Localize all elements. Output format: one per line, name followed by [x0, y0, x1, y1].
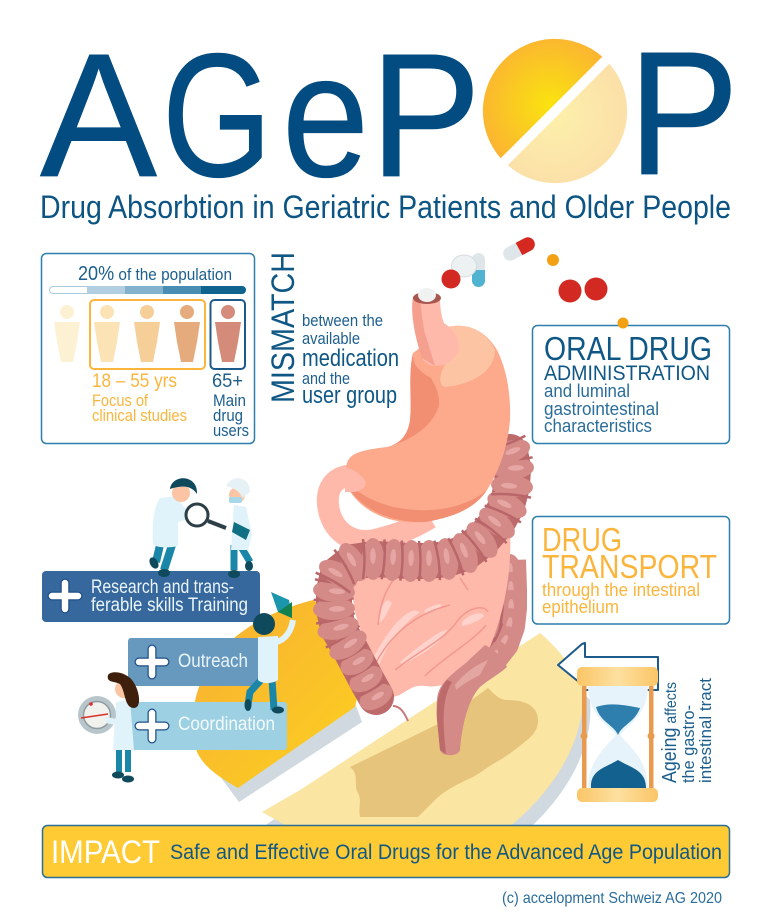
- label: main drug users: Main: [213, 391, 246, 410]
- text: ageing affects: Ageing affects: [659, 682, 681, 783]
- label: main drug users: 65+: [212, 371, 243, 392]
- button: outreach: Outreach: [178, 651, 248, 672]
- panel: drug transport: TRANSPORT: [542, 548, 717, 585]
- text: ageing affects: [659, 678, 715, 783]
- heading: 20% of the population: 20% of the population: [78, 263, 232, 285]
- label: clinical studies: [92, 371, 187, 425]
- text: mismatch description: between the: [302, 311, 383, 330]
- button: research training: [42, 571, 260, 622]
- panel: oral drug administration: and luminal: [544, 381, 630, 401]
- text: mismatch description: [302, 311, 399, 409]
- label: clinical studies: 18 – 55 yrs: [92, 371, 177, 392]
- heading: MISMATCH: MISMATCH: [265, 252, 301, 403]
- panel: drug transport: through the intestinal: [542, 580, 700, 600]
- title: AGePOP: e: [282, 18, 369, 214]
- label: clinical studies: Focus of: [92, 391, 148, 410]
- icon: pills: [442, 235, 628, 328]
- label: main drug users: users: [213, 421, 249, 440]
- title: AGePOP: G: [162, 18, 272, 214]
- text: ageing affects: the gastro-: [679, 705, 698, 783]
- button: research training: Research and trans-: [91, 577, 234, 598]
- title: AGePOP: A: [40, 18, 158, 214]
- panel: oral drug administration: ADMINISTRATION: [544, 362, 710, 385]
- illustration: rectum: [437, 645, 507, 755]
- label: main drug users: drug: [213, 406, 243, 425]
- stomach highlight over duodenum: [345, 467, 366, 492]
- people row: [54, 305, 241, 362]
- illustration: duodenum: [328, 476, 430, 541]
- illustration: descending colon: [472, 554, 523, 678]
- text: mismatch description: and the: [302, 369, 350, 388]
- icon: split pill as letter O: [483, 39, 627, 183]
- button: research training: ferable skills Training: [91, 595, 248, 616]
- text: mismatch description: user group: [302, 382, 397, 409]
- figure: researcher holding dial: [78, 672, 139, 782]
- panel: drug transport: epithelium: [542, 597, 619, 617]
- button: coordination: [130, 702, 287, 750]
- highlight box: 65+: [210, 300, 245, 369]
- banner: impact: Safe and Effective Oral Drugs for the Advanced Age Population: [170, 841, 722, 864]
- text: ageing affects: intestinal tract: [696, 678, 715, 783]
- panel: oral drug administration: characteristics: [544, 416, 652, 436]
- population bar: [50, 286, 246, 294]
- illustration: colon front section: [312, 434, 534, 716]
- illustration: oesophagus: [412, 288, 459, 366]
- panel: drug transport: [532, 516, 730, 624]
- highlight box: 18-55: [90, 300, 205, 369]
- banner: impact: IMPACT: [51, 834, 160, 870]
- button: coordination: Coordination: [178, 714, 275, 735]
- text: mismatch description: available: [302, 329, 360, 348]
- title: AGePOP: [40, 16, 739, 214]
- illustration: small intestine: [350, 530, 510, 697]
- label: main drug users: [212, 371, 249, 440]
- copyright: (c) accelopment Schweiz AG 2020: [502, 890, 722, 907]
- icon: hourglass: [577, 667, 658, 802]
- label: clinical studies: clinical studies: [92, 406, 187, 425]
- figure: two researchers with magnifier: [148, 478, 253, 578]
- arrow: ageing to gut: [558, 643, 658, 690]
- text: mismatch description: medication: [302, 345, 399, 372]
- panel: population mismatch: [42, 254, 254, 444]
- panel: oral drug administration: [532, 326, 730, 444]
- panel: drug transport: DRUG: [542, 521, 622, 558]
- panel: oral drug administration: ORAL DRUG: [544, 330, 712, 367]
- button: outreach: [128, 638, 260, 686]
- title: AGePOP: P: [628, 16, 739, 212]
- panel: oral drug administration: gastrointestinal: [544, 399, 659, 419]
- figure: researcher holding tablet: [244, 592, 293, 714]
- title: AGePOP: P: [370, 18, 481, 214]
- illustration: appendix: [393, 706, 408, 721]
- background: large split pill: [193, 600, 590, 828]
- illustration: stomach: [345, 326, 510, 523]
- banner: impact: [42, 826, 730, 878]
